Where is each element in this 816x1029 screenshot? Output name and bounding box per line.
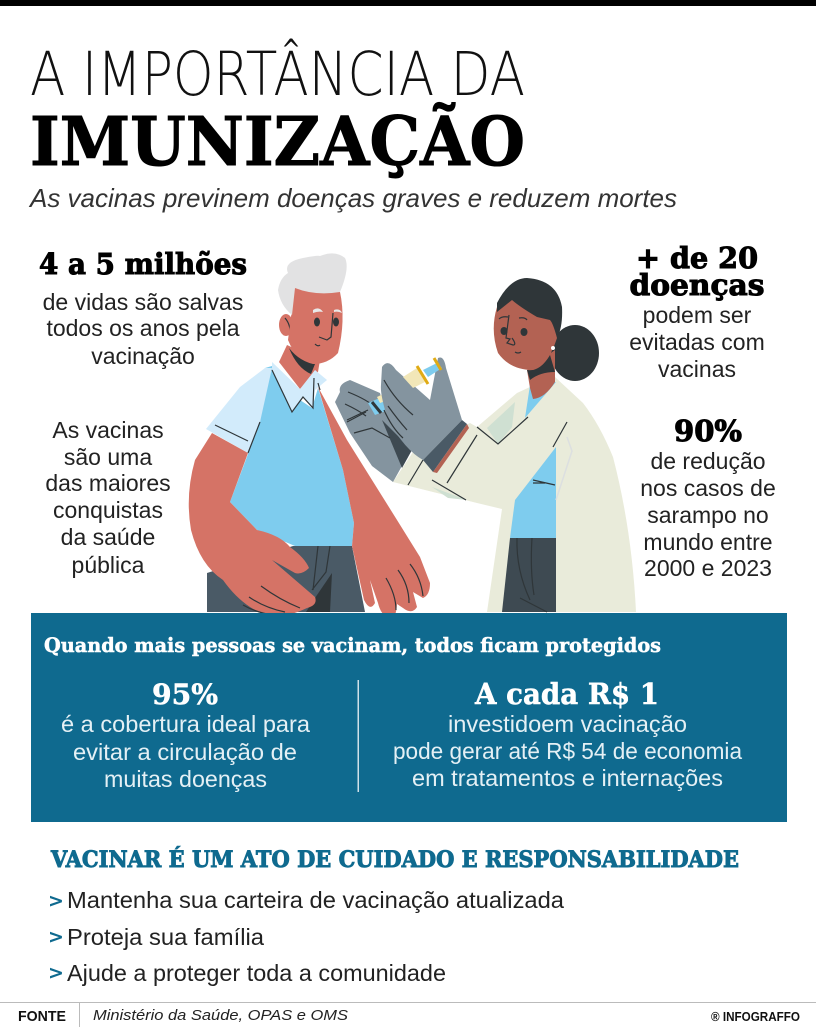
stat: A cada R$ 1: em tratamentos e internações xyxy=(412,765,723,791)
stat: 4 a 5 milhões: 4 a 5 milhões xyxy=(39,247,247,281)
checklist xyxy=(48,887,564,986)
stat: 90%: 2000 e 2023 xyxy=(644,555,772,581)
stat: + de 20 doenças: + de 20 xyxy=(636,241,758,275)
stat: 95%: 95% xyxy=(152,678,218,711)
checklist: > xyxy=(48,890,64,912)
stat: + de 20 doenças xyxy=(629,241,765,382)
syringe upper part xyxy=(403,358,442,388)
illustration: elderly man xyxy=(189,253,430,619)
footer xyxy=(0,1002,816,1027)
doctor trousers xyxy=(502,538,556,612)
illustration: doctor xyxy=(335,278,636,612)
stat: 90% xyxy=(640,414,776,581)
man head xyxy=(278,253,347,364)
checklist: Mantenha sua carteira de vacinação atualizada xyxy=(67,887,564,913)
stat: 4 a 5 milhões: vacinação xyxy=(91,343,195,369)
man hair xyxy=(278,253,347,315)
title: IMUNIZAÇÃO xyxy=(30,102,525,181)
stat: 4 a 5 milhões: todos os anos pela xyxy=(46,315,240,341)
brand: ® INFOGRAFFO xyxy=(711,1010,800,1024)
stat: A cada R$ 1: pode gerar até R$ 54 de economia xyxy=(393,738,742,764)
source text: Ministério da Saúde, OPAS e OMS xyxy=(93,1007,348,1024)
stat: + de 20 doenças: doenças xyxy=(630,268,764,302)
stat: 90%: 90% xyxy=(674,414,742,448)
glove: lower hand xyxy=(335,380,412,482)
stat: 4 a 5 milhões xyxy=(39,247,247,369)
man trousers xyxy=(207,546,365,612)
man neck xyxy=(279,345,320,389)
checklist: > xyxy=(48,962,64,984)
doctor head xyxy=(494,278,562,370)
stat: 95%: evitar a circulação de xyxy=(73,739,297,765)
stat: 95% xyxy=(61,678,310,792)
man sweater xyxy=(230,366,354,546)
text block: conquistas xyxy=(45,417,171,578)
man collar xyxy=(272,362,327,412)
stat: + de 20 doenças: evitadas com xyxy=(629,329,765,355)
subtitle: As vacinas previnem doenças graves e reduzem mortes xyxy=(28,183,677,213)
text block: conquistas: das maiores xyxy=(45,470,171,496)
stat: + de 20 doenças: podem ser xyxy=(643,302,752,328)
stat: 90%: de redução xyxy=(650,448,766,474)
title: A IMPORTÂNCIA DA xyxy=(30,38,525,110)
syringe lower part xyxy=(347,393,388,420)
checklist: Proteja sua família xyxy=(67,924,264,950)
title xyxy=(30,38,525,181)
stat: 95%: é a cobertura ideal para xyxy=(61,711,310,737)
stat: A cada R$ 1: A cada R$ 1 xyxy=(474,677,659,711)
text block: conquistas: As vacinas xyxy=(52,417,164,443)
stat: + de 20 doenças: vacinas xyxy=(658,356,736,382)
stat: 4 a 5 milhões: de vidas são salvas xyxy=(43,289,243,315)
doctor neck xyxy=(527,350,555,399)
stat: A cada R$ 1 xyxy=(393,677,742,791)
text block: conquistas: pública xyxy=(72,552,145,578)
doctor bun xyxy=(551,325,599,381)
stat: A cada R$ 1: investidoem vacinação xyxy=(448,711,687,737)
doctor blue top xyxy=(510,382,556,538)
stat: 90%: nos casos de xyxy=(640,475,776,501)
doctor hair xyxy=(497,278,562,338)
stat: 95%: muitas doenças xyxy=(104,766,267,792)
stat: 90%: sarampo no xyxy=(647,502,769,528)
doctor coat xyxy=(393,377,636,612)
checklist: > xyxy=(48,926,64,948)
stat: 90%: mundo entre xyxy=(643,529,773,555)
checklist: Ajude a proteger toda a comunidade xyxy=(67,960,446,986)
man sleeve xyxy=(206,368,272,453)
panel heading: Quando mais pessoas se vacinam, todos ficam protegidos xyxy=(44,633,661,657)
text block: conquistas: conquistas xyxy=(53,497,163,523)
section heading: VACINAR É UM ATO DE CUIDADO E RESPONSABILIDADE xyxy=(50,846,739,873)
man right arm and hand xyxy=(318,387,430,619)
text block: conquistas: são uma xyxy=(64,444,152,470)
panel: protection xyxy=(31,613,787,822)
man left arm and hand xyxy=(189,433,316,615)
source label: FONTE xyxy=(18,1008,66,1025)
glove: upper hand xyxy=(381,357,469,473)
doctor coat lines xyxy=(408,417,567,500)
text block: conquistas: da saúde xyxy=(61,524,155,550)
glove cuff xyxy=(423,420,467,472)
